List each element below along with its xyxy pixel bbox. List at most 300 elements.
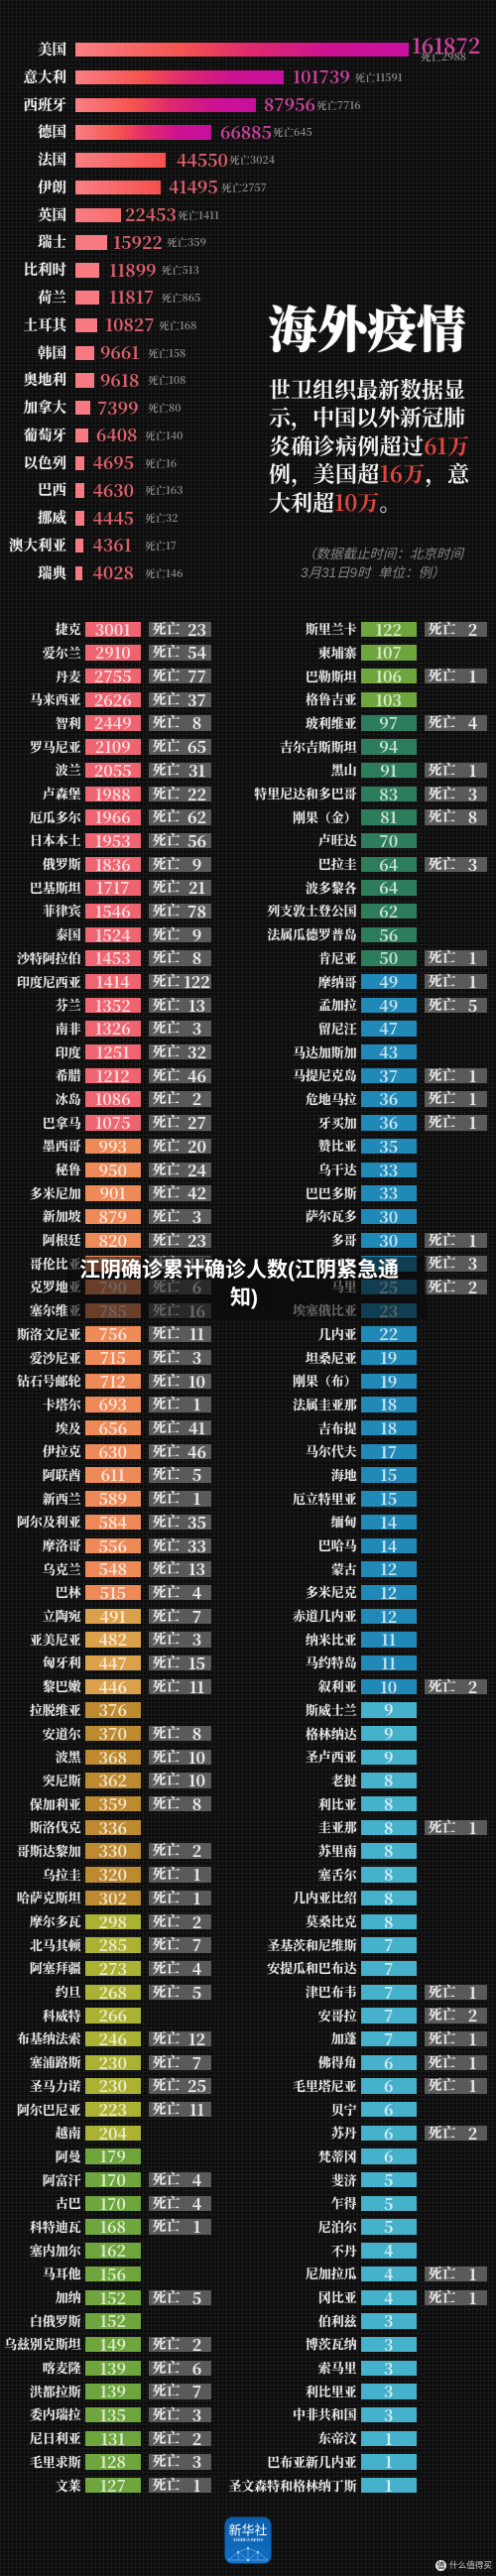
row: 7 — [384, 1957, 393, 1980]
row — [0, 1679, 211, 1694]
bar row: 荷兰: 11817 — [109, 285, 154, 309]
row: 47 — [379, 1017, 398, 1040]
row: 77 — [187, 665, 206, 687]
row: 13 — [188, 994, 205, 1017]
row: 24 — [187, 1159, 206, 1180]
row — [226, 2148, 487, 2164]
bar row: 挪威: 死亡32 — [145, 511, 178, 526]
row — [226, 857, 487, 872]
row: 马尔代夫 — [306, 1441, 357, 1460]
row: 死亡 — [153, 2075, 181, 2095]
row: 5 — [384, 2168, 393, 2191]
row — [0, 1209, 211, 1224]
bar row: 美国: 161872 — [412, 31, 480, 61]
row — [0, 1091, 211, 1107]
row: 64 — [379, 876, 398, 899]
row — [30, 876, 211, 899]
row — [0, 1163, 211, 1177]
row: 35 — [187, 1511, 206, 1533]
row — [0, 1985, 211, 2000]
row: 1953 — [95, 829, 131, 852]
logo: Xinhua News app icon: XINHUA NEWS — [233, 2537, 264, 2542]
bar row: 德国: 66885 — [220, 120, 272, 145]
row: 死亡 — [153, 1864, 181, 1884]
row: 7 — [384, 1981, 393, 2004]
row: 留尼汪 — [318, 1019, 357, 1038]
row: 879 — [99, 1205, 127, 1228]
row: 2 — [192, 2333, 201, 2356]
row: 坦桑尼亚 — [306, 1347, 357, 1367]
row: 9 — [192, 923, 201, 946]
row: 1352 — [95, 994, 131, 1017]
row: 2055 — [94, 759, 132, 782]
row: 320 — [99, 1863, 127, 1886]
row: 50 — [379, 946, 398, 969]
row: 3 — [192, 1205, 201, 1228]
row: 死亡 — [153, 877, 181, 897]
row: 死亡 — [153, 1277, 181, 1296]
row — [0, 1397, 211, 1412]
row: 6 — [192, 2357, 201, 2380]
row: 马耳他 — [43, 2264, 81, 2282]
row: 马来西亚 — [30, 689, 81, 708]
bar row: 瑞士: 死亡359 — [167, 235, 206, 250]
row — [226, 1021, 487, 1037]
bar row: 西班牙: 西班牙 — [24, 94, 66, 115]
bar row: 瑞士: 15922 — [113, 230, 163, 255]
row: 12 — [380, 1557, 397, 1580]
row: 丹麦 — [56, 667, 81, 685]
row: 273 — [99, 1957, 127, 1980]
row: 1524 — [95, 923, 131, 946]
row: 文莱 — [56, 2476, 81, 2494]
row — [226, 2196, 487, 2211]
text block: WHO summary: 世卫组织最新数据显 — [269, 374, 465, 405]
row: 14 — [380, 1511, 397, 1533]
row: 佛得角 — [318, 2052, 357, 2071]
row: 斯里兰卡 — [306, 619, 357, 638]
row: 6 — [192, 1276, 201, 1298]
bar row: 奥地利: 死亡108 — [148, 373, 186, 388]
row — [226, 2407, 487, 2422]
bar row: 加拿大: 死亡80 — [148, 401, 181, 416]
bar row: 奥地利 — [24, 368, 186, 393]
row: 死亡 — [153, 2451, 181, 2471]
row: 482 — [99, 1628, 127, 1651]
bar row: 德国: 德国 — [38, 121, 66, 142]
row: 1 — [469, 2263, 476, 2285]
row: 230 — [99, 2074, 127, 2097]
row — [30, 805, 211, 828]
row: 梵蒂冈 — [318, 2147, 357, 2165]
row: 立陶宛 — [43, 1606, 81, 1625]
row — [0, 1350, 211, 1365]
row — [226, 645, 487, 661]
row: 54 — [187, 641, 206, 664]
row: 捷克 — [56, 619, 81, 638]
row — [226, 1163, 487, 1177]
bar row: 巴西: 4630 — [93, 478, 134, 503]
bar row: 英国: 死亡1411 — [178, 208, 219, 223]
row — [226, 833, 487, 848]
row: 埃及 — [56, 1418, 81, 1437]
row — [226, 1139, 487, 1154]
row: 死亡 — [153, 642, 181, 662]
text block: WHO summary: 例，美国超16万，意 — [269, 458, 469, 489]
row: 亚美尼亚 — [30, 1630, 81, 1649]
text block: WHO summary: 示，中国以外新冠肺 — [269, 402, 465, 432]
row: 死亡 — [153, 1910, 181, 1930]
row: 4 — [192, 1957, 201, 1980]
row: 127 — [100, 2474, 126, 2497]
row — [0, 1632, 211, 1648]
row — [0, 2478, 211, 2493]
row: 莫桑比克 — [306, 1911, 357, 1930]
row: 11 — [189, 1675, 204, 1698]
row — [226, 1561, 487, 1577]
row: 哈萨克斯坦 — [17, 1888, 81, 1906]
row: 11 — [189, 1322, 204, 1345]
logo: Xinhua News app icon: 新华社 — [228, 2519, 268, 2539]
table: left column countries — [4, 618, 211, 2497]
row: 170 — [100, 2192, 126, 2215]
row — [0, 1726, 211, 1741]
row: 156 — [100, 2263, 126, 2285]
row: 伯利兹 — [318, 2311, 357, 2330]
row — [226, 2102, 487, 2117]
bar row: 以色列: 4695 — [93, 450, 134, 475]
row: 死亡 — [153, 2193, 181, 2213]
row — [0, 1937, 211, 1953]
row: 塞浦路斯 — [30, 2052, 81, 2071]
row: 泰国 — [56, 924, 81, 943]
row: 11 — [381, 1628, 396, 1651]
row: 3 — [384, 2380, 393, 2402]
row: 塞内加尔 — [30, 2241, 81, 2260]
row: 18 — [380, 1416, 397, 1439]
row — [226, 692, 487, 707]
row: 圣基茨和尼维斯 — [267, 1935, 357, 1954]
row: 10 — [188, 1746, 205, 1769]
row: 246 — [99, 2027, 127, 2050]
row — [0, 1185, 211, 1201]
row: 巴布亚新几内亚 — [267, 2452, 357, 2471]
row: 安提瓜和巴布达 — [267, 1958, 357, 1977]
row — [226, 1397, 487, 1412]
row — [0, 1867, 211, 1883]
row: 乌克兰 — [43, 1559, 81, 1578]
row: 152 — [100, 2309, 126, 2332]
row: 152 — [100, 2285, 126, 2309]
row: 死亡 — [429, 784, 456, 803]
row: 8 — [384, 1769, 393, 1791]
row: 波黑 — [56, 1747, 81, 1766]
row: 5 — [384, 2215, 393, 2238]
row: 死亡 — [153, 1018, 181, 1038]
row: 12 — [380, 1581, 397, 1604]
row — [226, 1726, 487, 1741]
row: 死亡 — [153, 666, 181, 685]
row: 乌拉圭 — [43, 1865, 81, 1884]
bar row: 加拿大: 加拿大 — [24, 397, 66, 418]
row: 死亡 — [153, 1159, 181, 1178]
row: 厄瓜多尔 — [30, 807, 81, 826]
row: 3 — [468, 853, 477, 876]
row: 哥斯达黎加 — [17, 1841, 81, 1860]
row — [0, 1609, 211, 1624]
row: 5 — [384, 2192, 393, 2215]
row — [17, 970, 211, 993]
row — [226, 2008, 487, 2024]
row: 沙特阿拉伯 — [17, 948, 81, 967]
bar row: 加拿大: 7399 — [97, 396, 139, 421]
row: 死亡 — [429, 2287, 456, 2307]
row — [43, 782, 211, 805]
bar row: 比利时: 比利时 — [24, 259, 66, 280]
bar row: 土耳其: 土耳其 — [24, 314, 66, 335]
bar row: 西班牙 — [24, 92, 360, 117]
row: 博茨瓦纳 — [306, 2334, 357, 2353]
bar row: 西班牙: 死亡7716 — [316, 98, 360, 113]
row: 几内亚 — [318, 1324, 357, 1343]
bar row: 巴西: 死亡163 — [145, 483, 183, 498]
bar row: 葡萄牙: 6408 — [96, 423, 138, 447]
row: 8 — [468, 805, 477, 828]
row: 死亡 — [153, 2381, 181, 2400]
row — [0, 1115, 211, 1131]
row: 107 — [376, 641, 402, 664]
row: 摩尔多瓦 — [30, 1911, 81, 1930]
row — [226, 2267, 487, 2281]
row: 死亡 — [153, 1606, 181, 1626]
row: 3 — [468, 782, 477, 805]
row: 46 — [187, 1440, 206, 1463]
row: 94 — [379, 735, 398, 758]
row — [0, 2337, 211, 2352]
row: 5 — [468, 994, 477, 1017]
row: 2626 — [94, 688, 132, 711]
row: 死亡 — [153, 760, 181, 780]
row: 9 — [384, 1698, 394, 1721]
row — [226, 904, 487, 919]
row: 6 — [384, 2074, 393, 2097]
row: 10 — [188, 1370, 205, 1393]
row: 1717 — [96, 876, 130, 899]
row: 死亡 — [153, 1441, 181, 1461]
row — [0, 1467, 211, 1483]
row — [226, 998, 487, 1013]
row: 35 — [379, 1135, 398, 1158]
row: 4 — [384, 2263, 393, 2285]
row: 41 — [188, 1416, 205, 1439]
bar row: 德国 — [38, 120, 312, 145]
row: 越南 — [56, 2123, 81, 2142]
row: 死亡 — [153, 1182, 181, 1202]
row — [226, 715, 487, 731]
row: 死亡 — [153, 2028, 181, 2048]
row: 204 — [99, 2122, 127, 2145]
bar row: 瑞士: 瑞士 — [38, 231, 66, 252]
row: 81 — [380, 805, 397, 828]
row: 8 — [384, 1887, 393, 1909]
row: 715 — [100, 1346, 126, 1369]
row — [0, 1561, 211, 1577]
bar row: 荷兰 — [38, 285, 200, 309]
bar row: 英国: 英国 — [38, 204, 66, 225]
row — [0, 2313, 211, 2329]
row: 14 — [380, 1533, 397, 1557]
row: 死亡 — [153, 924, 181, 944]
row — [0, 1773, 211, 1788]
row: 7 — [384, 2027, 393, 2050]
row: 3001 — [95, 618, 131, 641]
row: 死亡 — [153, 1230, 181, 1250]
row: 死亡 — [153, 1582, 181, 1602]
row: 死亡 — [153, 712, 181, 732]
row — [0, 1326, 211, 1342]
row: 圭亚那 — [318, 1817, 357, 1836]
row: 4 — [384, 2239, 393, 2262]
row: 黎巴嫩 — [43, 1676, 81, 1695]
row: 8 — [192, 711, 201, 734]
row: 2 — [468, 1675, 477, 1698]
row: 匈牙利 — [43, 1653, 81, 1671]
row — [226, 1444, 487, 1459]
row: 中非共和国 — [293, 2404, 357, 2423]
row: 491 — [99, 1605, 126, 1628]
row: 死亡 — [153, 1535, 181, 1555]
row: 斐济 — [331, 2170, 357, 2189]
row: 170 — [100, 2168, 126, 2191]
row: 128 — [100, 2450, 126, 2473]
row: 64 — [379, 853, 398, 876]
row — [0, 1420, 211, 1435]
row: 65 — [187, 735, 206, 758]
row: 91 — [380, 759, 397, 782]
row: 马达加斯加 — [293, 1043, 357, 1061]
bar row: 英国: 22453 — [125, 202, 177, 227]
row: 圣文森特和格林纳丁斯 — [228, 2476, 357, 2494]
row — [226, 1702, 487, 1718]
row: 巴勒斯坦 — [306, 667, 357, 685]
row — [226, 622, 487, 637]
row — [226, 1326, 487, 1342]
row: 139 — [99, 2357, 126, 2380]
row: 卡塔尔 — [43, 1395, 81, 1413]
row: 安道尔 — [43, 1724, 81, 1742]
row: 吉布提 — [318, 1418, 357, 1437]
row: 8 — [384, 1816, 393, 1839]
row — [226, 880, 487, 896]
row: 巴巴多斯 — [306, 1183, 357, 1202]
row — [226, 1044, 487, 1059]
row — [226, 2313, 487, 2329]
row: 智利 — [56, 713, 81, 732]
row: 死亡 — [153, 1371, 181, 1391]
row: 死亡 — [153, 1676, 181, 1696]
row: 31 — [188, 759, 205, 782]
bar row: 葡萄牙 — [24, 423, 183, 447]
row — [226, 1937, 487, 1953]
row: 阿根廷 — [43, 1230, 81, 1249]
row: 9 — [384, 1722, 394, 1745]
row: 缅甸 — [331, 1512, 357, 1531]
row: 15 — [380, 1487, 397, 1510]
row: 死亡 — [153, 1417, 181, 1437]
row: 死亡 — [429, 619, 456, 639]
row: 死亡 — [429, 1817, 456, 1837]
row: 1 — [193, 1393, 200, 1415]
row — [226, 809, 487, 825]
row — [226, 1867, 487, 1883]
row: 8 — [384, 1863, 393, 1886]
row: 牙买加 — [318, 1113, 357, 1132]
overlay title banner — [67, 1257, 427, 1319]
row — [56, 923, 211, 946]
row — [0, 2031, 211, 2046]
row: 死亡 — [153, 1982, 181, 2002]
row: 25 — [187, 2074, 206, 2097]
row: 8 — [384, 1910, 393, 1932]
overlay title text — [79, 1257, 417, 1312]
row: 罗马尼亚 — [30, 737, 81, 756]
bar row: 巴西 — [38, 478, 183, 503]
text block: WHO summary — [269, 374, 469, 518]
bar row: 澳大利亚: 死亡17 — [145, 539, 177, 553]
row: 死亡 — [153, 1747, 181, 1767]
row: 9 — [384, 1746, 394, 1769]
row: 死亡 — [153, 1464, 181, 1484]
row: 36 — [379, 1087, 398, 1110]
row — [0, 2361, 211, 2376]
row — [0, 1656, 211, 1670]
row: 1 — [469, 1229, 476, 1252]
row — [226, 1773, 487, 1788]
row — [226, 2031, 487, 2046]
row: 83 — [379, 782, 398, 805]
row: 1 — [469, 1064, 476, 1087]
row: 死亡 — [153, 689, 181, 709]
row: 1453 — [95, 946, 131, 969]
row: 摩纳哥 — [318, 972, 357, 990]
row: 1 — [469, 1111, 476, 1134]
row — [226, 1609, 487, 1624]
row: 乍得 — [331, 2193, 357, 2212]
row: 死亡 — [429, 1230, 456, 1250]
row: 死亡 — [153, 1065, 181, 1085]
bar row: 法国: 法国 — [38, 149, 66, 170]
row: 10 — [380, 1675, 397, 1698]
row — [0, 1843, 211, 1859]
row — [42, 853, 211, 876]
row: 死亡 — [429, 971, 456, 991]
row — [226, 1656, 487, 1670]
row: 4 — [192, 2168, 201, 2191]
row — [0, 1068, 211, 1083]
row: 3 — [192, 2403, 201, 2426]
row: 死亡 — [153, 1042, 181, 1061]
row: 多哥 — [331, 1230, 357, 1249]
row: 446 — [99, 1675, 127, 1698]
row: 新西兰 — [43, 1489, 81, 1508]
row — [0, 1233, 211, 1248]
row: 科威特 — [43, 2006, 81, 2024]
row: 拉脱维亚 — [30, 1700, 81, 1719]
row — [226, 1350, 487, 1365]
row: 格鲁吉亚 — [306, 689, 357, 708]
row: 死亡 — [429, 2005, 456, 2024]
row — [226, 1185, 487, 1201]
